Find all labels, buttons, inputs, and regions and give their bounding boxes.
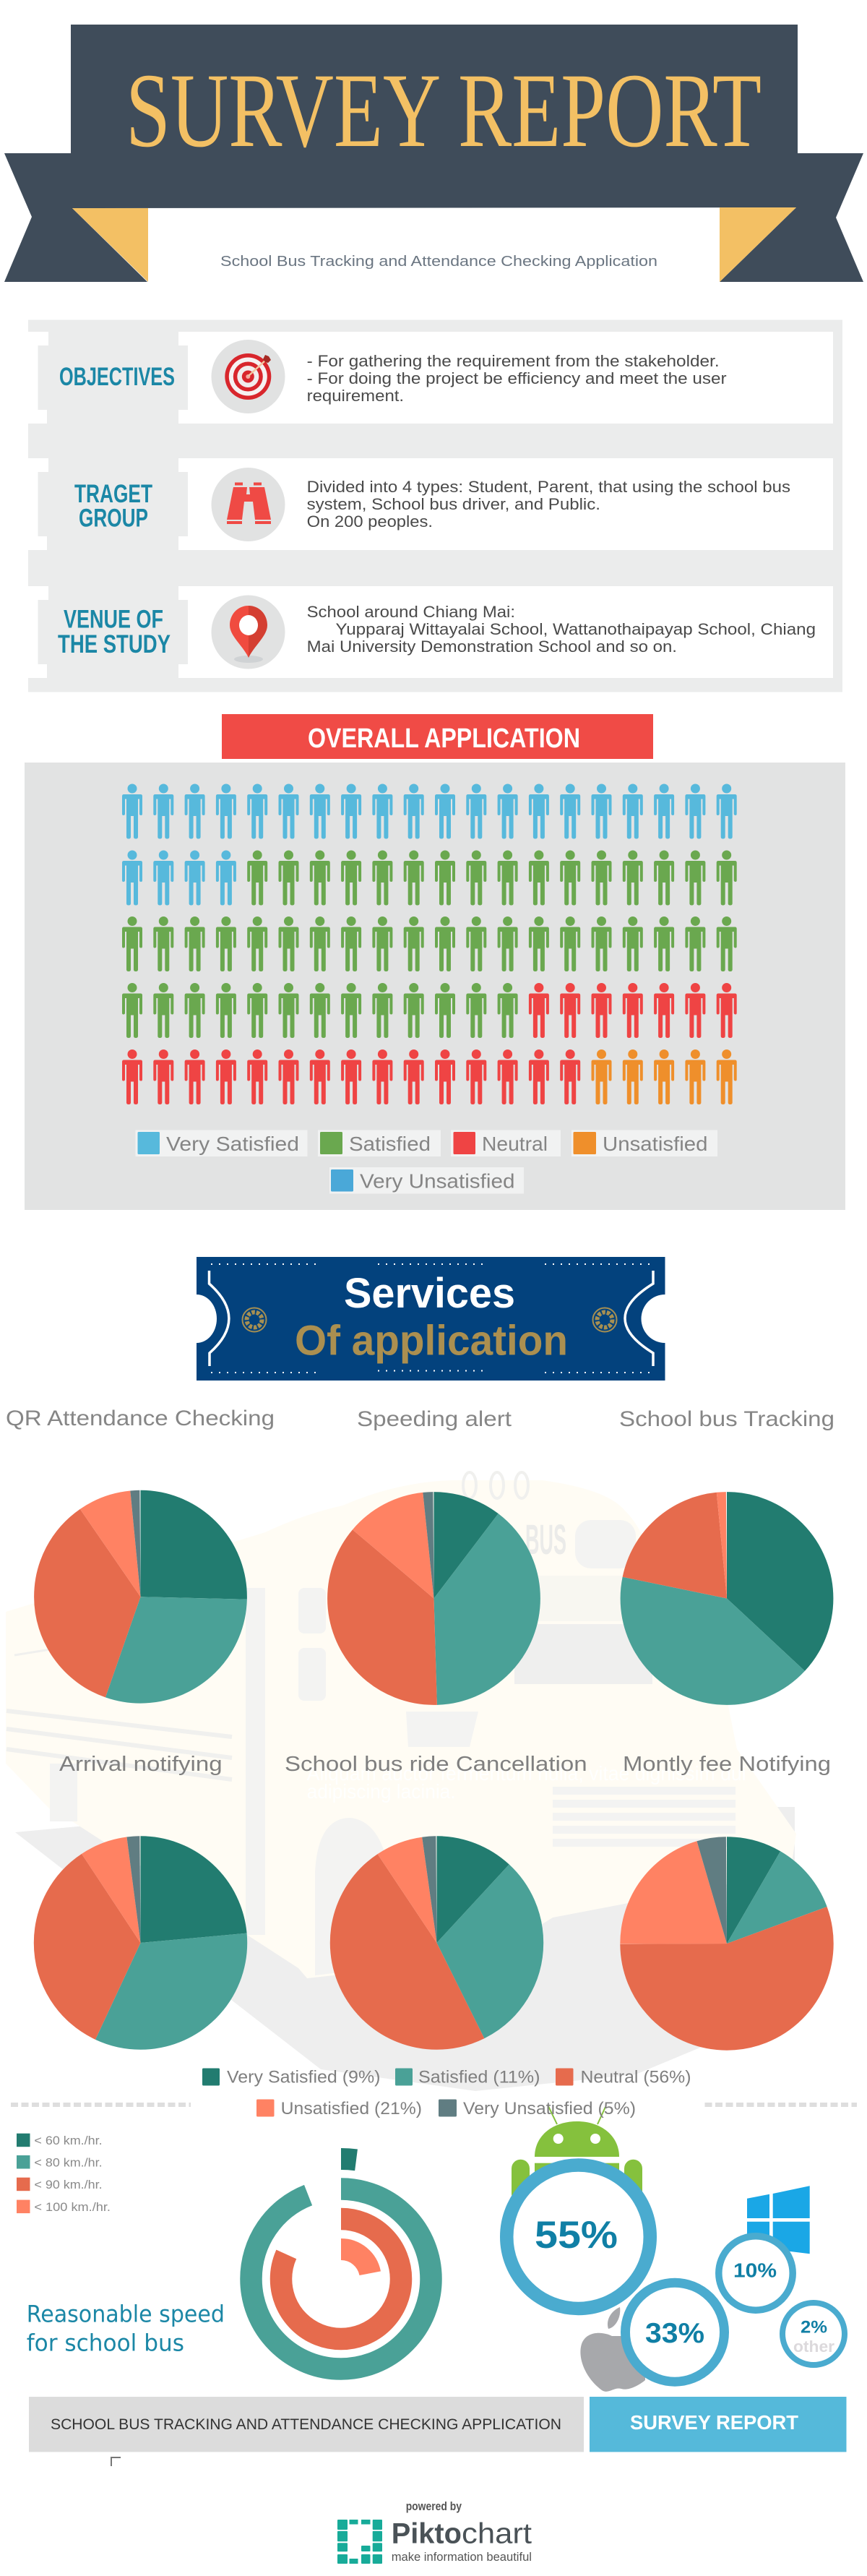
heading: traget group: GROUP — [79, 505, 148, 532]
icon: apple — [580, 2307, 645, 2392]
heading: services of application ticket: Services — [344, 1270, 515, 1317]
text: powered by: powered by — [406, 2499, 462, 2513]
row: objectives — [28, 332, 833, 424]
footer bar: survey report: SURVEY REPORT — [630, 2411, 798, 2434]
stat: other 2% — [782, 2303, 845, 2365]
stat: android 55% — [506, 2165, 650, 2309]
text: objectives — [307, 352, 727, 405]
text: piktochart wordmark: Pikto — [392, 2517, 462, 2549]
chart titles: second row — [59, 1753, 831, 1776]
heading: services of application ticket — [197, 1257, 665, 1381]
legend: speed: < 80 km./hr. — [34, 2157, 103, 2170]
legend: pie charts: Neutral (56%) — [581, 2067, 691, 2087]
heading: overall application: OVERALL APPLICATION — [308, 724, 580, 754]
heading: services of application ticket: Of application — [295, 1317, 568, 1365]
stat: ios 33%: 33% — [645, 2318, 704, 2349]
logo: piktochart: make information beautiful — [392, 2550, 532, 2564]
heading: venue of the study: VENUE OF — [64, 606, 163, 633]
panel: overall application pictogram — [25, 763, 845, 1210]
background: faded school bus: Aliquam auctor fermentum nulla, vitae dignissim dui — [307, 1762, 746, 1785]
footer bar: application name: SCHOOL BUS TRACKING AND ATTENDANCE CHECKING APPLICATION — [51, 2416, 561, 2433]
legend: overall application: Unsatisfied — [603, 1133, 708, 1155]
row: target group — [28, 458, 833, 550]
chart: people row 5 — [122, 1049, 737, 1104]
chart: people row 2 — [122, 850, 737, 905]
icon: binoculars — [211, 468, 285, 541]
logo: piktochart: chart — [462, 2517, 532, 2549]
legend: pie charts — [202, 2067, 691, 2118]
text: target group: On 200 peoples. — [307, 512, 433, 531]
text: objectives: - For gathering the requirement from the stakeholder. — [307, 352, 720, 370]
heading: traget group — [74, 480, 152, 532]
stat: other 2%: other — [793, 2337, 834, 2356]
legend: speed: < 100 km./hr. — [34, 2201, 111, 2214]
icon: map pin — [211, 596, 285, 669]
icon: android — [512, 2105, 642, 2203]
subtitle: School Bus Tracking and Attendance Checking Application — [220, 254, 657, 270]
chart titles: second row: Arrival notifying — [59, 1753, 223, 1776]
footer bar: survey report — [590, 2397, 847, 2452]
text: target group: system, School bus driver, and Public. — [307, 495, 600, 513]
pie chart: QR attendance checking — [87, 1544, 194, 1650]
text: objectives: requirement. — [307, 387, 404, 405]
legend: pie charts: Satisfied (11%) — [418, 2067, 540, 2087]
icon: windows — [747, 2186, 810, 2254]
legend: overall application: Very Satisfied — [166, 1133, 299, 1155]
legend: speed: < 90 km./hr. — [34, 2178, 103, 2191]
icon: piktochart mark — [337, 2520, 382, 2564]
legend: overall application: Neutral — [482, 1133, 548, 1155]
chart: people row 1 — [122, 783, 737, 838]
chart titles: second row: School bus ride Cancellation — [285, 1753, 587, 1776]
legend: overall application: Satisfied — [349, 1133, 431, 1155]
pie chart: arrival notifying — [87, 1889, 194, 1996]
legend: speed — [17, 2134, 111, 2214]
stat: windows 10%: 10% — [733, 2259, 777, 2282]
logo: piktochart — [337, 2499, 532, 2564]
background: faded school bus: BUS — [525, 1516, 566, 1563]
heading: venue of the study — [58, 606, 171, 658]
row: venue of the study — [28, 586, 833, 678]
pie chart: school bus ride cancellation — [384, 1889, 490, 1996]
chart titles: first row — [6, 1407, 834, 1431]
chart: speed radial bars — [221, 2159, 461, 2399]
chart: people row 3 — [122, 916, 737, 971]
chart: people row 4 — [122, 983, 737, 1038]
pie chart: montly fee notifying — [673, 1890, 780, 1997]
background: faded school bus: adipiscing lacinia. — [307, 1780, 456, 1803]
legend: overall application: Very Unsatisfied — [360, 1169, 514, 1193]
stat: ios 33% — [626, 2283, 724, 2382]
text: venue: Mai University Demonstration School and so on. — [307, 637, 677, 656]
legend: overall application — [136, 1130, 717, 1194]
heading: overall application — [222, 714, 653, 759]
text: reasonable speed — [27, 2301, 225, 2356]
text: objectives: - For doing the project be efficiency and meet the user — [307, 369, 727, 387]
heading: traget group: TRAGET — [74, 480, 152, 508]
text: target group — [307, 478, 790, 531]
pie chart: speeding alert — [381, 1545, 487, 1652]
text: reasonable speed: Reasonable speed — [27, 2301, 225, 2328]
background: faded school bus — [6, 1472, 796, 2091]
legend: pie charts: Very Unsatisfied (5%) — [463, 2099, 636, 2118]
legend: pie charts: Very Satisfied (9%) — [227, 2067, 380, 2087]
banner: survey report ribbon — [4, 25, 863, 282]
icon: target — [211, 340, 285, 413]
chart titles: first row: School bus Tracking — [619, 1407, 834, 1431]
chart titles: second row: Montly fee Notifying — [623, 1753, 831, 1776]
pie chart: school bus tracking — [673, 1545, 780, 1652]
heading: venue of the study: THE STUDY — [58, 630, 171, 658]
text: reasonable speed: for school bus — [27, 2329, 184, 2356]
legend: speed: < 60 km./hr. — [34, 2134, 103, 2147]
footer bar: application name — [29, 2397, 584, 2452]
chart titles: first row: QR Attendance Checking — [6, 1407, 275, 1430]
text: target group: Divided into 4 types: Student, Parent, that using the school bus — [307, 478, 790, 496]
text: venue: Yupparaj Wittayalai School, Wattanothaipayap School, Chiang — [335, 620, 816, 638]
heading: objectives: OBJECTIVES — [59, 363, 175, 391]
stat: android 55%: 55% — [535, 2214, 618, 2257]
panel: objectives, target group, venue — [28, 319, 842, 692]
legend: pie charts: Unsatisfied (21%) — [281, 2099, 422, 2118]
text: venue: School around Chiang Mai: — [307, 603, 515, 621]
chart titles: first row: Speeding alert — [357, 1407, 512, 1431]
stat: other 2%: 2% — [801, 2317, 827, 2337]
text: venue — [307, 603, 816, 656]
stat: windows 10% — [719, 2236, 793, 2310]
